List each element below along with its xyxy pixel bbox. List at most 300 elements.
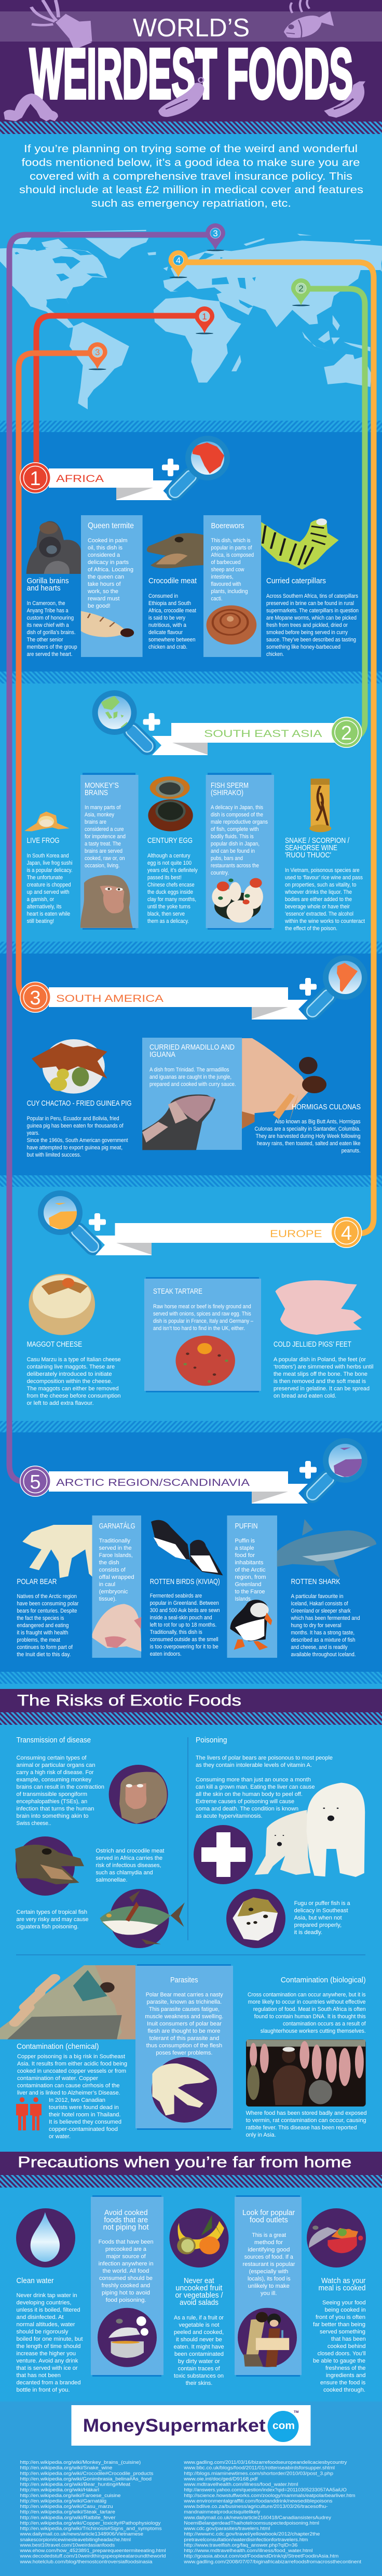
food: curried caterpillars: sauce. They’ve been described as tasting: [266, 637, 356, 643]
image: century egg: [148, 776, 193, 831]
food: live frog: heart is eaten while: [27, 911, 70, 917]
column: watch as your meal is cooked: [307, 2208, 366, 2393]
logo: MoneySupermarket: TM: [294, 2410, 298, 2414]
column: clean water: boiled for one minute, but: [17, 2336, 83, 2342]
pin: Arctic: 3: [213, 229, 218, 238]
panel: contamination (biological): Where food has been stored badly and exposed: [246, 2110, 367, 2116]
column: never eat uncooked fruit: vegetable is not: [179, 2322, 219, 2328]
sources: left column: http://en.wikipedia.org/wiki/Hákarl: [20, 2487, 99, 2492]
sources: right column: www.gadling.com/2008/07/07/biginafricabizarrefoodsfromacrossthecontinent: [183, 2559, 362, 2564]
image: wine bottle: [309, 779, 331, 832]
food: century egg: black, then serve: [147, 911, 185, 917]
image: shark: [277, 1519, 376, 1578]
icon: caterpillar: [4, 93, 58, 121]
food: gorilla brains and hearts: [26, 521, 81, 658]
logo: MoneySupermarket: MoneySupermarket: [83, 2416, 266, 2436]
image: ant held in fingers: [242, 1038, 326, 1129]
icon: tropical fish in purple oval: [100, 1889, 185, 1948]
food: cold jellied pigs' feet: is then removed and the soft meat is: [274, 1378, 366, 1385]
sources: left column: http://en.wikipedia.org/wiki/Faroese_cuisine: [20, 2493, 121, 2498]
panel: boerewors: Africa, is composed: [211, 552, 254, 558]
food: rotten birds: consumed outside as the smell: [150, 1636, 219, 1643]
food: rotten birds: Fermented seabirds are: [150, 1593, 202, 1599]
column: watch as your meal is cooked: far better than being: [313, 2322, 365, 2328]
icon: magnifier Arctic: [299, 1438, 367, 1507]
panel: monkey's brains: occasion, living.: [85, 863, 120, 869]
food: crocodile meat: is said to be very: [148, 615, 185, 621]
food: live frog: LIVE FROG: [27, 837, 60, 845]
food: hormigas culonas: Also known as Big Butt Ants, Hormigas: [275, 1119, 361, 1125]
panel: contamination (biological): found to contain human DNA. It is thought this: [254, 2014, 366, 2020]
food: maggot cheese: containing live maggots. These are: [27, 1364, 115, 1370]
column: watch as your meal is cooked: ingredients and: [326, 2372, 365, 2379]
sources: left column: www.dailymail.co.uk/news/article1348906/Vietnamese: [19, 2531, 143, 2537]
panel: avoid cooked foods: Avoid cooked: [104, 2208, 148, 2217]
panel: boerewors: sheep and cow: [211, 567, 244, 573]
image: polar bears: [255, 1783, 365, 1877]
panel: puffin: a staple: [235, 1545, 254, 1551]
section: South East Asia: [24, 690, 365, 932]
food: snake wine: within the wine works to counteract: [284, 918, 365, 924]
panel: parasites: Parasites: [170, 1976, 198, 1984]
sources: left column: www.hotelclub.com/blog/themostcontroversialfoodsinasia: [19, 2559, 153, 2564]
panel: garnatalg: tissue).: [99, 1596, 117, 1602]
panel: boerewors: cacti.: [211, 596, 222, 602]
ribbon: Europe: [96, 1217, 362, 1255]
food: century egg: the duck eggs inside: [147, 889, 193, 895]
food: hormigas culonas: They are harvested during Holy Week following: [255, 1133, 360, 1139]
panel: puffin: food for: [235, 1552, 255, 1559]
panel: contamination (chemical): contamination of water. Copper: [17, 2075, 98, 2082]
panel: transmission of disease: brains can result in the contraction: [17, 1784, 104, 1790]
panel: avoid cooked foods: not piping hot: [103, 2223, 149, 2232]
column: clean water: normal altitudes, water: [17, 2322, 75, 2328]
food: century egg: years old, it’s definitely: [147, 867, 198, 874]
panel: avoid cooked foods: food poisoning.: [106, 2297, 146, 2303]
food: gorilla brains and hearts: are served the heart.: [27, 651, 73, 658]
food: century egg: [147, 776, 198, 924]
food: rotten shark: Iceland, Hakarl consists of: [291, 1601, 348, 1607]
food: rotten shark: described as a mixture of fish: [291, 1637, 355, 1643]
section: Africa: [20, 436, 359, 658]
panel: puffin: PUFFIN: [235, 1522, 257, 1531]
food: polar bear: POLAR BEAR: [17, 1578, 57, 1586]
food: rotten birds: 300 and 500 Auk birds are sewn: [150, 1607, 220, 1614]
sources: right column: www.bbc.co.uk/blogs/food/2011/01/rottenseabirdsforsupper.shtml: [183, 2465, 335, 2471]
panel: boerewors: plants, including: [211, 588, 248, 595]
image: shirako: [212, 878, 263, 923]
panel: fish sperm: of fish, complete with: [211, 826, 258, 833]
food: live frog: alternatively, its: [27, 904, 62, 910]
panel: monkey's brains: In many parts of: [85, 804, 121, 811]
food: gorilla brains and hearts: and hearts: [27, 584, 61, 593]
panel: monkey's brains: cooked, raw or, on: [85, 855, 125, 862]
food: live frog: is a popular delicacy.: [27, 867, 73, 874]
sources: right column: www.dailymail.co.uk/news/article2160418/CanadiansistersAudrey: [183, 2515, 332, 2520]
panel: look for popular food outlets: identifying good: [248, 2247, 290, 2253]
food: century egg: them as a delicacy.: [147, 918, 189, 924]
panel: contamination (chemical): tourists were found dead in: [49, 2104, 119, 2111]
intro text: such as emergency repatriation, etc.: [91, 198, 291, 209]
panel: transmission of disease: Swiss cheese..: [17, 1820, 51, 1827]
panel: contamination (chemical): or water.: [49, 2134, 71, 2140]
sources: right column: http://science.howstuffworks.com/zoology/mammals/eatpolarbearliver.htm: [184, 2493, 355, 2498]
column: never eat uncooked fruit: peeled and cooked,: [174, 2329, 224, 2336]
food: hormigas culonas: heavy rains, then toasted, salted and eaten like: [257, 1141, 360, 1147]
panel: contamination (chemical): [0, 1965, 135, 2140]
food: polar bear: the fact the species is: [17, 1615, 64, 1621]
image: cheese: [29, 1274, 95, 1335]
sources: left column: www.best10travel.com/10weirdasianfoods: [19, 2543, 115, 2548]
panel: look for popular food outlets: you ill.: [261, 2290, 277, 2297]
food: polar bear: problems, the meat: [17, 1637, 60, 1643]
panel: poisoning: as acute hypervitaminosis.: [196, 1813, 263, 1819]
column: clean water: increase the higher you: [17, 2351, 76, 2357]
panel: steak tartare: served with onions, spices and raw egg. This: [153, 1311, 251, 1317]
food: crocodile meat: Ethiopia and South: [148, 600, 191, 607]
pin: South America: [88, 342, 107, 370]
panel: avoid cooked foods: infection anywhere in: [99, 2261, 154, 2267]
image: tartare: [175, 1336, 235, 1386]
column: clean water: that has not been: [17, 2372, 61, 2379]
panel: parasites: tolerant of this parasite and: [149, 2035, 219, 2042]
food: snake wine: 'RUOU THUOC': [285, 851, 331, 860]
sources: left column: www.decodedstuff.com/10weirdthingspeopleeataroundtheworld: [19, 2554, 166, 2559]
food: century egg: Chinese chefs encase: [147, 882, 195, 888]
panel: queen termite: take hours of: [88, 581, 121, 587]
sources: right column: www.bdlive.co.za/business/agriculture/2013/03/26/tracesofhu-: [183, 2504, 328, 2509]
food: snake wine: In Vietnam, poisonous species are: [285, 867, 360, 874]
panel: avoid cooked foods: precooked are a: [105, 2246, 147, 2252]
ribbon: South East Asia: [152, 717, 362, 755]
logo: MoneySupermarket: [72, 2405, 310, 2446]
sources: right column: http://goasia.about.com/od/FoodandDrink/qt/StreetFoodinAsia.htm: [184, 2554, 338, 2559]
sources: right column: http://www.travelfish.org/faq_answer.php?qID=36: [184, 2543, 297, 2548]
panel: parasites: parasite, known as trichinella.: [147, 1999, 222, 2005]
panel: boerewors: This dish, which is: [211, 538, 251, 544]
intro text: foods mentioned below, it’s a good idea to make sure you are: [22, 157, 360, 168]
food: curried caterpillars: Curried caterpillars: [266, 577, 326, 585]
ribbon: South East Asia: SOUTH EAST ASIA: [204, 729, 322, 740]
panel: poisoning: Extreme causes of poisoning will cause: [196, 1799, 294, 1805]
food: crocodile meat: Consumed in: [148, 593, 178, 599]
image: gorilla: [26, 521, 81, 574]
panel: look for popular food outlets: locals), its food is: [248, 2276, 291, 2282]
sources: right column: mandnainmeatproductsquitelikely: [184, 2510, 261, 2515]
world map: [0, 230, 382, 409]
panel: look for popular food outlets: sources of food. If a: [244, 2254, 294, 2260]
food: rotten shark: ROTTEN SHARK: [291, 1578, 340, 1586]
panel: puffin: of the Arctic: [235, 1567, 266, 1573]
food: rotten birds: inside a seal-skin pouch and: [150, 1615, 212, 1621]
pin: South East Asia: [291, 278, 311, 306]
food: cold jellied pigs' feet: COLD JELLIED PIGS’ FEET: [274, 1340, 351, 1349]
food: gorilla brains and hearts: Gorilla brains: [27, 577, 69, 585]
food: hormigas culonas: [242, 1038, 361, 1154]
ribbon: South America: SOUTH AMERICA: [56, 994, 163, 1004]
ribbon: Arctic: ARCTIC REGION/SCANDINAVIA: [56, 1478, 250, 1488]
panel: poisoning: The livers of polar bears are poisonous to most people: [196, 1755, 333, 1761]
food: cold jellied pigs' feet: preserved in gelatine. It can be spread: [274, 1386, 370, 1392]
panel: look for popular food outlets: Look for popular: [242, 2208, 295, 2217]
food: maggot cheese: [27, 1274, 121, 1406]
icon: couple at table in purple oval: [238, 2308, 297, 2367]
column: never eat uncooked fruit: [169, 2208, 228, 2386]
icon: polar bear in purple oval: [152, 2057, 217, 2123]
intro text: If you’re planning on trying some of the weird and wonderful: [24, 143, 358, 155]
ribbon: South East Asia: 2: [341, 722, 352, 744]
food: live frog: still beating!: [27, 918, 54, 924]
panel: avoid cooked foods: major source of: [106, 2253, 146, 2260]
ribbon: Arctic: [20, 1466, 308, 1504]
panel: transmission of disease: Certain types of tropical fish: [17, 1909, 87, 1915]
panel: steak tartare: dish is popular in France, Italy and Germany –: [153, 1318, 254, 1324]
column: never eat uncooked fruit: by dirty water or: [178, 2358, 220, 2365]
icon: steel pot in purple oval: [98, 2308, 157, 2367]
panel: avoid cooked foods: consumed should be: [99, 2275, 153, 2282]
food: live frog: [24, 812, 73, 924]
column: watch as your meal is cooked: Seeing your food: [322, 2300, 366, 2306]
food: live frog: Japan, live frog sushi: [27, 860, 73, 866]
panel: look for popular food outlets: method for: [254, 2239, 283, 2246]
food: polar bear: it is fraught with health: [17, 1630, 68, 1636]
panel: parasites: thus consumption of the flesh: [146, 2043, 222, 2049]
panel: fish sperm: male reproductive organs: [211, 819, 268, 825]
panel: avoid cooked foods: piping hot to avoid: [102, 2290, 150, 2296]
column: clean water: should be rigorously: [17, 2329, 69, 2335]
food: rotten birds: ROTTEN BIRDS (KIVIAQ): [150, 1578, 220, 1586]
food: live frog: In South Korea and: [27, 853, 69, 859]
column: never eat uncooked fruit: or vegetables /: [175, 2291, 223, 2300]
panel: queen termite: of Africa. Locating: [88, 567, 133, 573]
panel: fish sperm: A delicacy in Japan, this: [211, 804, 263, 811]
food: live frog: creature is chopped: [27, 882, 71, 888]
icon: sausage: [324, 82, 365, 118]
food: curried caterpillars: something like honey-barbecued: [266, 644, 340, 650]
panel: fish sperm: country.: [211, 870, 229, 876]
ribbon: South America: [20, 982, 308, 1019]
column: never eat uncooked fruit: eaten. It might have: [174, 2344, 224, 2350]
pin: Africa: [195, 306, 214, 334]
food: gorilla brains and hearts: Anyang Tribe has a: [27, 608, 69, 614]
panel: contamination (biological): Contamination (biological): [281, 1976, 366, 1984]
column: clean water: unless it is boiled, filtered: [17, 2307, 80, 2313]
sources: right column: www.mdtravelhealth.com/illness/food_water.html: [183, 2481, 298, 2487]
panel: look for popular food outlets: (especially with: [249, 2269, 288, 2275]
panel: curried armadillo and iguana: A dish from Trinidad. The armadillos: [149, 1067, 229, 1073]
image: crocodile: [147, 533, 203, 568]
pin: Europe: 4: [176, 256, 181, 265]
panel: curried armadillo and iguana: IGUANA: [149, 1051, 175, 1059]
panel: puffin: Greenland: [235, 1581, 262, 1588]
panel: transmission of disease: are very risky and may cause: [17, 1916, 88, 1923]
food: century egg: clay for many months,: [147, 896, 196, 903]
food: rotten birds: Traditionally, this dish is: [150, 1629, 202, 1635]
panel: fish sperm: and can be found in: [211, 848, 255, 854]
column: watch as your meal is cooked: cooked through.: [323, 2387, 365, 2393]
image: frog: [24, 812, 70, 831]
panel: puffin: Puffin is: [235, 1538, 255, 1544]
panel: look for popular food outlets: This is a great: [252, 2232, 286, 2238]
food: fried guinea pig: Since the 1960s, South American government: [27, 1137, 128, 1144]
sources: right column: www.oie.int/doc/ged/D9168.pdf: [183, 2476, 258, 2481]
panel: contamination (biological): contamination occurs as a result of: [283, 2021, 366, 2027]
food: polar bear: bears for centuries. Despite: [17, 1608, 77, 1614]
food: century egg: egg is not quite 100: [147, 860, 192, 866]
image: polar bear: [22, 1525, 92, 1578]
sources: left column: http://en.wikipedia.org/wiki/Ratbite_fever: [20, 2515, 115, 2520]
pin: South East Asia: 2: [298, 284, 304, 293]
panel: parasites: Inuit consumers of polar bear: [147, 2021, 222, 2027]
column: clean water: and disinfected. At: [17, 2314, 63, 2320]
panel: queen termite: Queen termite: [88, 521, 134, 530]
heading: The Risks of Exotic Foods: The Risks of Exotic Foods: [17, 1692, 241, 1709]
column: watch as your meal is cooked: Watch as your: [321, 2276, 365, 2285]
panel: garnatalg: the dish: [99, 1560, 119, 1566]
panel: monkey's brains: for impotence and: [85, 834, 126, 840]
food: maggot cheese: or left to add extra flavour.: [27, 1400, 94, 1406]
sources: right column: pretravelconsultation/waterdisinfectionfortravelers.htm: [184, 2537, 308, 2542]
panel: puffin: inhabitants: [235, 1560, 264, 1566]
panel: look for popular food outlets: [235, 2195, 302, 2377]
image: auk birds: [151, 1520, 223, 1575]
pin: South America: 3: [95, 347, 100, 357]
sources: left column: www.ehow.com/how_4523891_preparequeentermiteeating.html: [19, 2548, 166, 2553]
panel: curried armadillo and iguana: and iguanas are caught in the jungle,: [149, 1074, 231, 1080]
panel: contamination (chemical): their hotel room in Thailand.: [49, 2112, 120, 2118]
food: curried caterpillars: Across Southern Africa, tins of caterpillars: [266, 593, 358, 599]
food: polar bear: the Inuit diet to this day.: [17, 1652, 71, 1658]
icon: two red people: [16, 2097, 42, 2130]
panel: boerewors: popular in parts of: [211, 545, 252, 551]
column: never eat uncooked fruit: As a rule, if a fruit or: [174, 2315, 224, 2321]
panel: transmission of disease: Ostrich and crocodile meat: [96, 1848, 164, 1854]
sources: left column: http://en.wikipedia.org/wiki/Trichinosis#Signs_and_symptoms: [20, 2526, 162, 2531]
panel: poisoning: prepared properly,: [294, 1922, 342, 1928]
icon: red pot in purple oval: [307, 2208, 366, 2268]
panel: transmission of disease: of transmissible spongiform: [17, 1791, 87, 1797]
panel: look for popular food outlets: unlikely to make: [248, 2283, 290, 2289]
sources: left column: http://en.wikipedia.org/wiki/Monkey_brains_(cuisine): [20, 2460, 141, 2465]
food: polar bear: Natives of the Arctic region: [17, 1593, 77, 1600]
panel: garnatalg: offal wrapped: [99, 1574, 134, 1580]
icon: fruit in purple oval: [169, 2208, 228, 2268]
panel: puffin: to the Faroe: [235, 1589, 265, 1595]
sources: left column: http://en.wikipedia.org/wiki/Steak_tartare: [20, 2510, 115, 2515]
column: never eat uncooked fruit: uncooked fruit: [175, 2284, 223, 2292]
food: maggot cheese: deliberately introduced to initiate: [27, 1371, 112, 1377]
column: never eat uncooked fruit: it should never be: [176, 2337, 222, 2343]
panel: avoid cooked foods: [91, 2195, 163, 2377]
food: crocodile meat: nutritious, with a: [148, 622, 187, 628]
panel: steak tartare: and isn’t too hard to find in the UK, either.: [153, 1325, 245, 1332]
image: boerewors sausage: [207, 606, 256, 645]
sources: right column: http://wwwnc.cdc.gov/travel/yellowbook/2012/chapter2the: [184, 2531, 320, 2537]
icon: water drop in purple oval: [16, 2208, 75, 2268]
panel: curried armadillo and iguana: prepared and cooked with curry sauce.: [149, 1081, 236, 1088]
panel: avoid cooked foods: freshly cooked and: [102, 2283, 150, 2289]
panel: avoid cooked foods: Foods that have been: [99, 2239, 154, 2245]
food: gorilla brains and hearts: The other senior: [27, 637, 63, 643]
image: monkey: [80, 875, 133, 928]
panel: fish sperm: popular dish in Japan,: [211, 841, 260, 847]
column: watch as your meal is cooked: closed doors. You’ll: [318, 2351, 366, 2357]
panel: fish sperm: bodily fluids. This is: [211, 834, 254, 840]
food: crocodile meat: Crocodile meat: [148, 577, 197, 585]
food: crocodile meat: Africa, crocodile meat: [148, 608, 196, 614]
icon: magnifier Europe: [38, 1190, 106, 1259]
food: rotten shark: and cheese, and is readily: [291, 1644, 348, 1651]
food: rotten birds: [150, 1520, 223, 1657]
panel: poisoning: Consuming more than just an ounce a month: [196, 1777, 311, 1783]
food: hormigas culonas: peanuts.: [342, 1148, 361, 1154]
panel: contamination (chemical): Asia. It results from either acidic food being: [17, 2061, 127, 2067]
food: snake wine: ‘essence’ extracted. The alcohol: [285, 911, 353, 917]
column: watch as your meal is cooked: meal is cooked: [319, 2284, 365, 2292]
food: fried guinea pig: CUY CHACTAO - FRIED GUINEA PIG: [27, 1099, 132, 1108]
panel: transmission of disease: such as chlamydia and: [96, 1870, 153, 1876]
food: rotten shark: Greenland or sleeper shark: [291, 1608, 351, 1614]
ribbon: Africa: 1: [30, 468, 41, 490]
food: fried guinea pig: Popular in Peru, Ecuador and Bolivia, fried: [27, 1116, 119, 1122]
sources: right column: http://www.mdtravelhealth.com/illness/food_water.html: [184, 2548, 312, 2553]
panel: poisoning: can kill a grown man. Eating the liver can cause: [196, 1784, 315, 1790]
food: rotten shark: which has been fermented and: [291, 1615, 360, 1621]
food: crocodile meat: [147, 533, 203, 650]
food: curried caterpillars: [261, 518, 359, 658]
panel: monkey's brains: Asia, monkey: [85, 812, 114, 818]
food: century egg: CENTURY EGG: [147, 837, 193, 845]
panel: transmission of disease: risk of infectious diseases,: [96, 1862, 161, 1869]
food: hormigas culonas: Culonas are a speciality in Santander, Columbia.: [254, 1126, 360, 1132]
icon: fish: [284, 0, 334, 39]
panel: garnatalg: served in the: [99, 1545, 132, 1551]
panel: transmission of disease: Transmission of disease: [17, 1736, 91, 1745]
sources: right column: [183, 2460, 362, 2564]
panel: poisoning: as they contain intolerable levels of vitamin A.: [196, 1762, 312, 1768]
intro text: should include at least £2 million in medical cover and features: [19, 184, 363, 196]
panel: parasites: Polar Bear meat carries a nasty: [146, 1992, 223, 1998]
food: hormigas culonas: HORMIGAS CULONAS: [292, 1103, 361, 1111]
panel: monkey's brains: BRAINS: [85, 789, 108, 797]
panel: poisoning: [194, 1736, 365, 1948]
column: clean water: decanted from a branded: [17, 2380, 81, 2386]
column: clean water: Clean water: [17, 2276, 54, 2285]
panel: monkey's brains: considered a cure: [85, 826, 124, 833]
panel: avoid cooked foods: foods that are: [104, 2216, 148, 2224]
panel: poisoning: Fugu or puffer fish is a: [294, 1900, 350, 1907]
panel: queen termite: reward must: [88, 596, 119, 602]
map pins: [88, 223, 311, 370]
column: watch as your meal is cooked: ensure the food is: [320, 2380, 366, 2386]
image: iguana: [142, 1094, 215, 1150]
panel: parasites: This parasite causes fatigue,: [149, 2006, 220, 2013]
pin: Arctic: [206, 223, 225, 251]
panel: queen termite: the queen can: [88, 574, 124, 580]
panel: boerewors: [203, 515, 261, 657]
ribbon: South America: 3: [30, 987, 41, 1009]
panel: steak tartare: [144, 1277, 261, 1392]
panel: fish sperm: (SHIRAKO): [211, 789, 243, 797]
ribbon: Africa: [20, 462, 172, 500]
food: cold jellied pigs' feet: [274, 1280, 374, 1399]
food: crocodile meat: somewhere between: [148, 637, 196, 643]
panel: contamination (chemical): liver and is linked to Alzheimer’s Disease.: [17, 2090, 120, 2096]
food: polar bear: continues to form part of: [17, 1644, 73, 1651]
panel: fish sperm: dish is composed of the: [211, 812, 263, 818]
food: curried caterpillars: fresh from trees and pickled, dried or: [266, 622, 348, 628]
column: clean water: that is served with ice or: [17, 2365, 78, 2371]
